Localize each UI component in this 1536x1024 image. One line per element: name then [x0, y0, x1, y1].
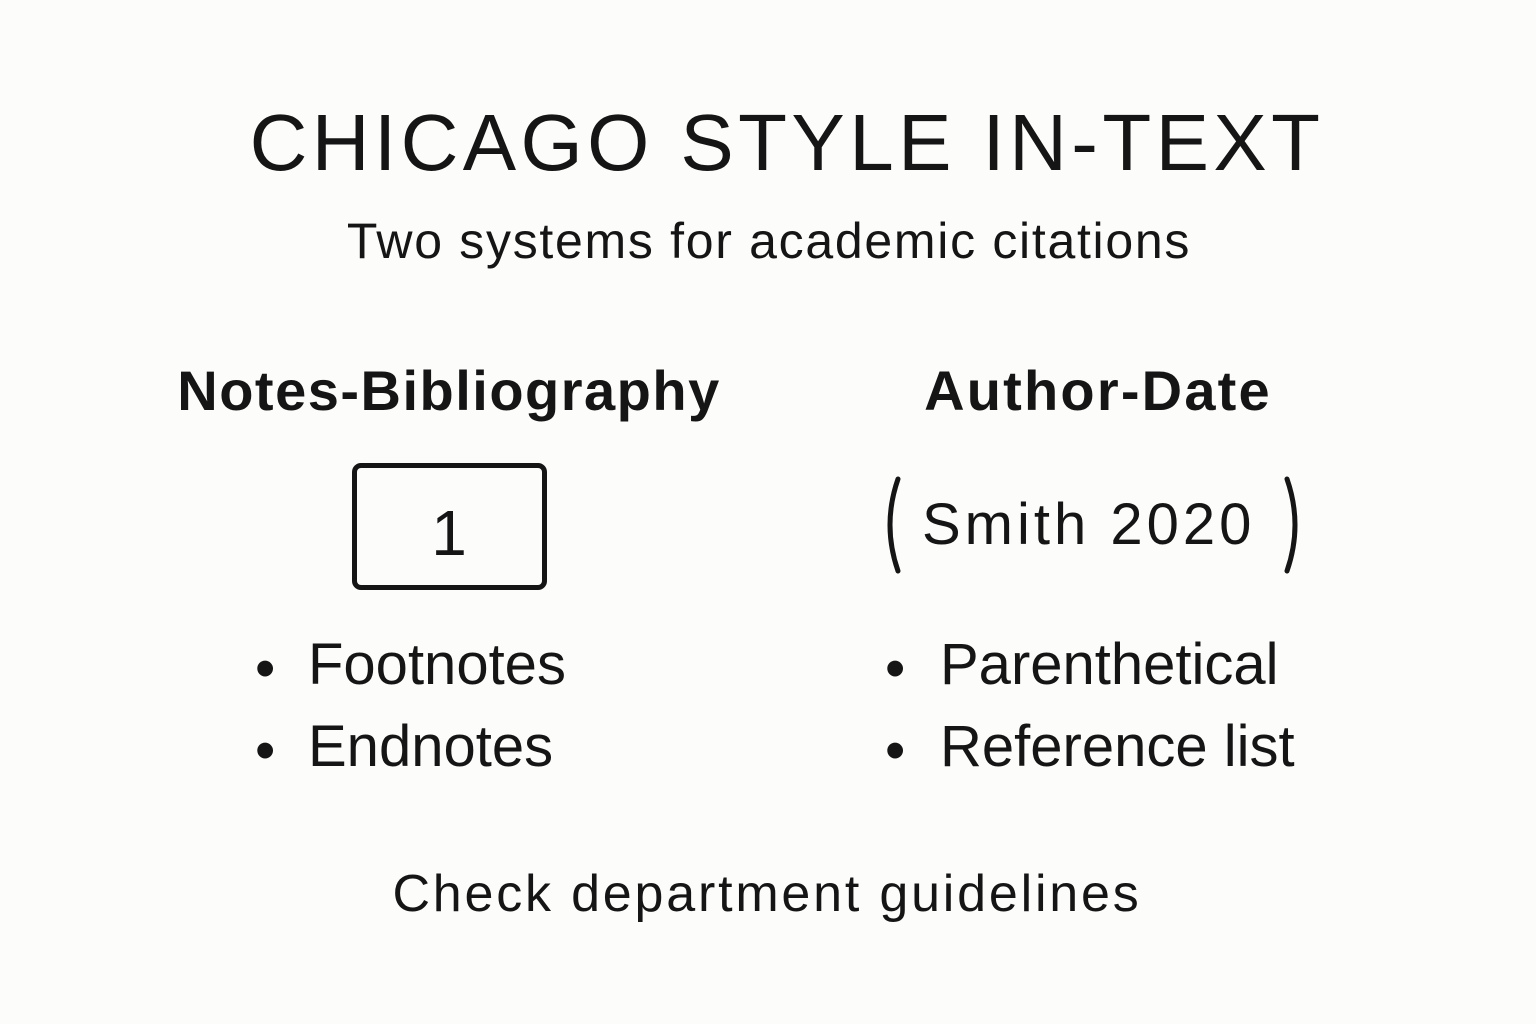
bullet list: notes: Footnotes [308, 632, 566, 697]
heading: author-date: Author-Date [924, 359, 1272, 422]
bullet list: author-date: Reference list [940, 714, 1295, 779]
footer note: Check department guidelines [392, 865, 1142, 923]
subtitle: Two systems for academic citations [347, 213, 1191, 269]
bullet list: author-date: • [885, 636, 905, 701]
icon: footnote number box [352, 463, 547, 590]
heading: notes-bibliography: Notes-Bibliography [177, 359, 721, 422]
bullet list: notes [255, 632, 566, 783]
panel: notes-bibliography [177, 359, 721, 783]
icon: footnote number box: 1 [431, 497, 467, 569]
bullet list: notes: • [255, 718, 275, 783]
bullet list: notes: Endnotes [308, 714, 553, 779]
bullet list: author-date: Parenthetical [940, 632, 1279, 697]
panel: author-date [885, 359, 1298, 783]
bullet list: author-date [885, 632, 1295, 783]
example: parenthetical citation: Smith 2020 [922, 492, 1255, 557]
bullet list: author-date: • [885, 718, 905, 783]
example: parenthetical citation [888, 476, 1298, 574]
bullet list: notes: • [255, 636, 275, 701]
title: CHICAGO STYLE IN-TEXT [250, 98, 1324, 187]
